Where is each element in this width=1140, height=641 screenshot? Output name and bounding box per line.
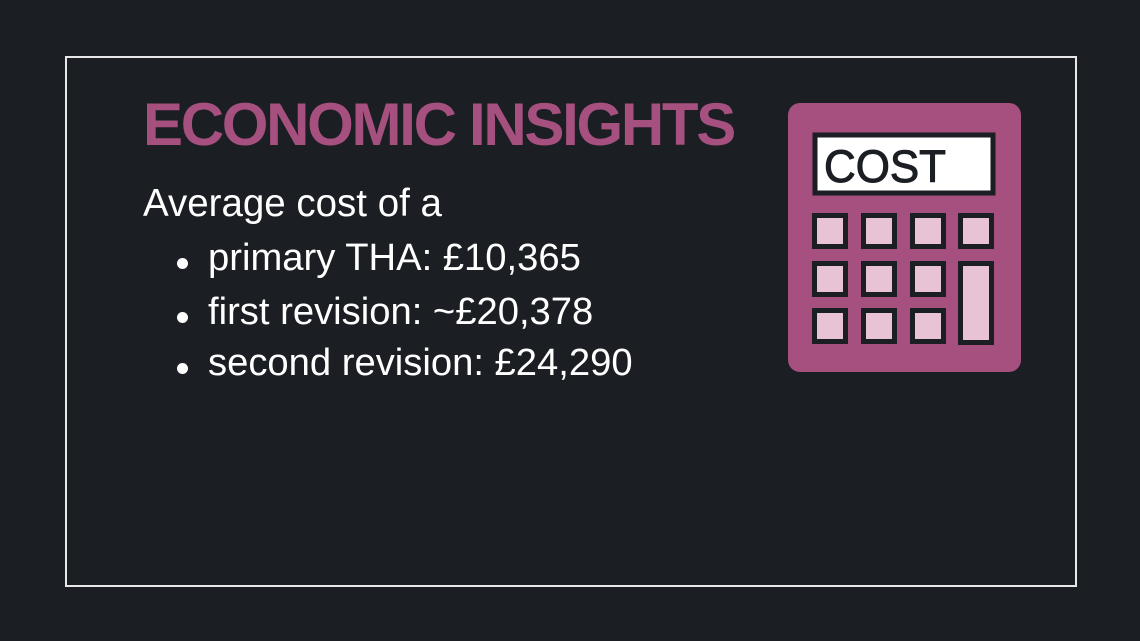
text: intro: Average cost of a <box>143 182 442 225</box>
bullet 2: first revision: ~£20,378 <box>208 290 593 333</box>
title: ECONOMIC INSIGHTS <box>143 91 734 158</box>
bullet 1: primary THA: £10,365 <box>208 236 581 279</box>
calculator display <box>815 135 993 193</box>
bullet list <box>177 236 633 384</box>
calculator display: COST <box>824 141 946 192</box>
frame <box>65 56 1077 587</box>
calculator buttons <box>814 216 992 342</box>
bullet 3: second revision: £24,290 <box>208 341 633 384</box>
